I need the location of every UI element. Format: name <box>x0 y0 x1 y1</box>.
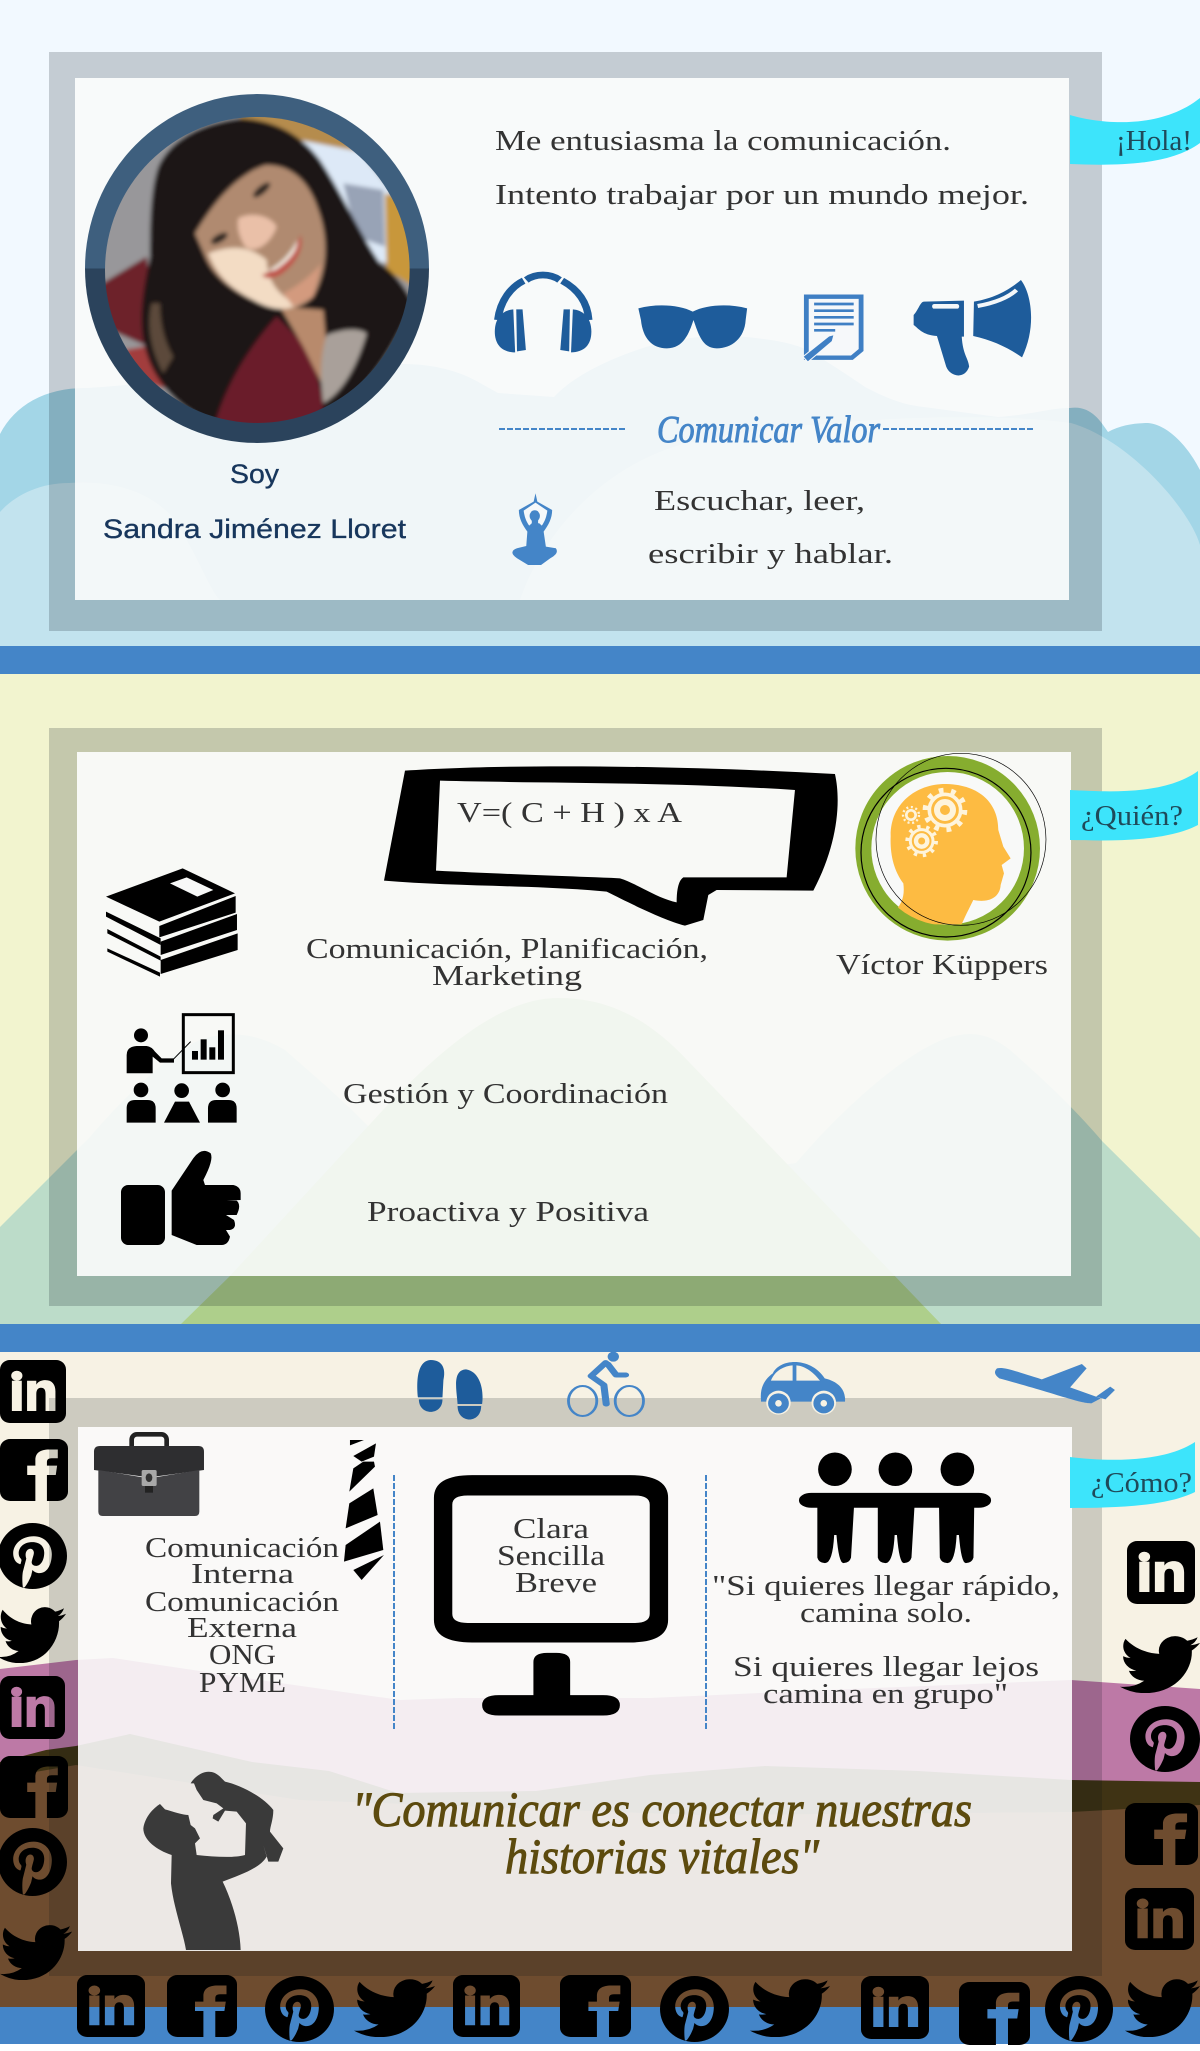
icon: head with gears <box>861 753 1046 937</box>
text: skills: Proactiva y Positiva <box>367 1197 650 1228</box>
text: areas: PYME <box>199 1668 286 1699</box>
text: skills: Gestión y Coordinación <box>343 1079 668 1110</box>
icon: headphones <box>495 275 591 352</box>
icon: footprints <box>417 1360 483 1419</box>
icon: group of three people <box>799 1452 991 1563</box>
icon: monitor with text: Breve <box>515 1568 597 1599</box>
icon: megaphone <box>914 280 1031 375</box>
icons row <box>495 275 1031 565</box>
quote: "Comunicar es conectar nuestras <box>352 1781 972 1837</box>
icon: monitor with text: Clara <box>513 1514 590 1545</box>
icon: father lifting baby <box>143 1772 283 1950</box>
intro text <box>495 126 1029 211</box>
icon: thumbs up <box>121 1151 241 1245</box>
background: section 2 mountains <box>0 674 1200 1324</box>
text: victor: Víctor Küppers <box>836 950 1048 981</box>
intro text: Intento trabajar por un mundo mejor. <box>495 180 1029 211</box>
icons column <box>106 868 241 1245</box>
text: areas: ONG <box>209 1640 276 1671</box>
icon: meditating figure <box>512 493 557 565</box>
icon: monitor with text: Sencilla <box>497 1541 606 1572</box>
speech bubble with formula <box>384 766 838 926</box>
icon: bicycle <box>568 1352 644 1416</box>
text: areas: Externa <box>187 1613 298 1644</box>
text: proverb: Si quieres llegar lejos <box>733 1652 1039 1683</box>
panel: como <box>49 1398 1195 1976</box>
text: areas: Comunicación <box>145 1587 339 1618</box>
tab: hola: ¡Hola! <box>1116 126 1192 157</box>
tab: quien: ¿Quién? <box>1081 801 1183 832</box>
icon: briefcase <box>94 1434 204 1516</box>
text: proverb: "Si quieres llegar rápido, <box>712 1571 1060 1602</box>
heading: comunicar valor: Comunicar Valor <box>657 409 880 451</box>
icon: airplane <box>995 1364 1115 1403</box>
name caption <box>103 459 407 544</box>
text: escuchar: escribir y hablar. <box>648 539 893 570</box>
social icons: left column <box>0 1360 72 1980</box>
icon: monitor with text <box>434 1475 668 1715</box>
text: areas: Comunicación <box>145 1533 339 1564</box>
tab: hola <box>1070 98 1200 165</box>
text: areas: Interna <box>191 1559 295 1590</box>
icon: document with pencil <box>803 297 861 362</box>
text: escuchar <box>648 486 893 570</box>
text: areas <box>145 1533 339 1699</box>
social icons: bottom row <box>77 1975 1200 2045</box>
quote <box>352 1781 972 1884</box>
text: skills <box>306 934 708 1228</box>
speech bubble with formula: V=( C + H ) x A <box>457 798 683 829</box>
background: section 3 landscape <box>0 1351 1200 2011</box>
text: skills: Comunicación, Planificación, <box>306 934 708 965</box>
transport icons <box>417 1352 1115 1419</box>
social icons: right column <box>1120 1541 1200 1950</box>
name caption: Soy <box>230 459 280 489</box>
profile photo <box>85 94 429 443</box>
text: proverb: camina en grupo" <box>763 1679 1008 1710</box>
intro text: Me entusiasma la comunicación. <box>495 126 951 157</box>
background: section 1 sky <box>0 0 1200 646</box>
tab: como <box>1070 1442 1195 1508</box>
panel: quien <box>49 728 1198 1306</box>
icon: car <box>761 1362 845 1415</box>
blue divider bands <box>0 646 1200 2044</box>
icon: presenter <box>127 1015 237 1123</box>
text: proverb: camina solo. <box>800 1598 972 1629</box>
icon: sunglasses <box>638 305 747 348</box>
tab: quien <box>1070 771 1198 840</box>
panel: hola <box>49 52 1200 631</box>
text: proverb <box>712 1571 1060 1710</box>
tab: como: ¿Cómo? <box>1091 1468 1192 1499</box>
icon: striped tie <box>344 1440 384 1580</box>
text: skills: Marketing <box>432 961 582 992</box>
text: escuchar: Escuchar, leer, <box>654 486 865 517</box>
icon: books <box>106 868 238 977</box>
quote: historias vitales" <box>505 1828 820 1884</box>
name caption: Sandra Jiménez Lloret <box>103 514 407 544</box>
